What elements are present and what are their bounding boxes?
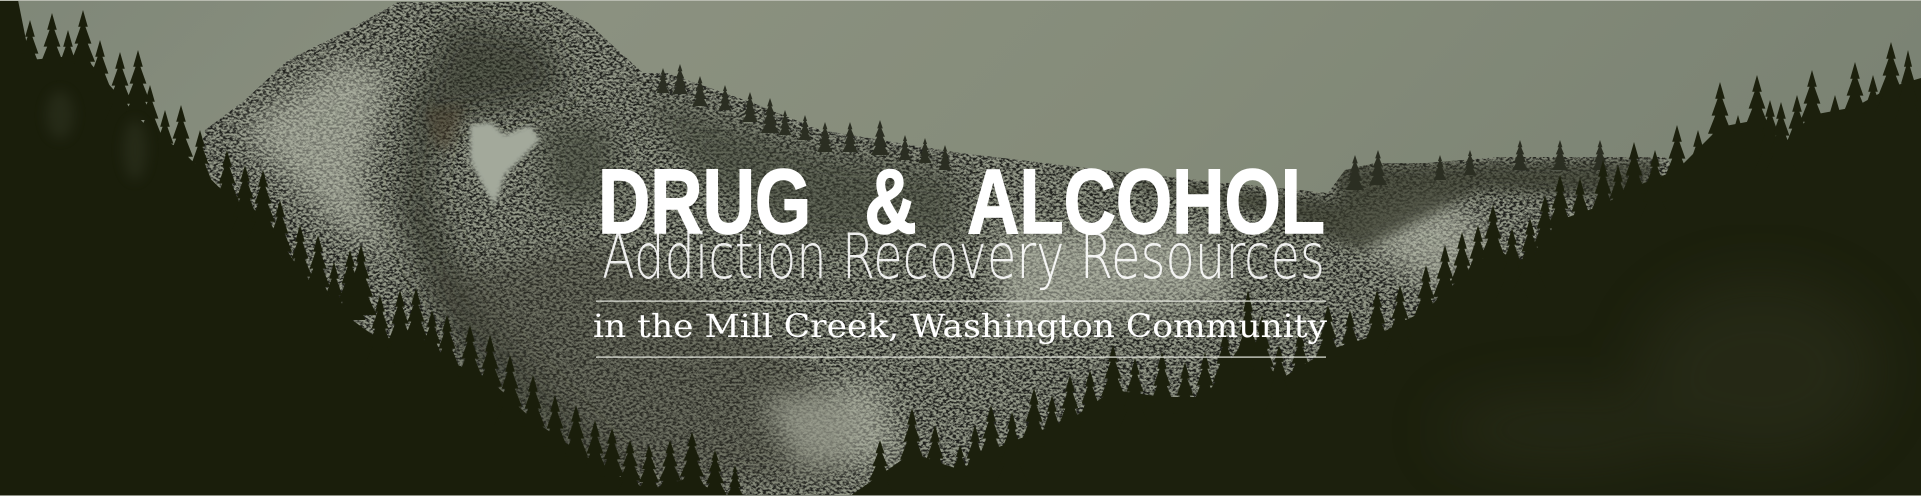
bright snow slope xyxy=(240,60,1500,470)
dark rock ridge xyxy=(400,20,640,480)
ridge trees xyxy=(656,64,1608,190)
forest: left slope xyxy=(0,0,743,496)
mist over forest xyxy=(1440,280,1880,465)
upper rule xyxy=(596,300,1326,302)
community line: in the Mill Creek, Washington Community xyxy=(593,307,1327,345)
bottom edge line xyxy=(0,495,1921,496)
wooded upper slope xyxy=(540,95,960,240)
top edge line xyxy=(0,0,1921,1)
subtitle: Addiction Recovery Resources xyxy=(602,220,1325,293)
distant trees band xyxy=(1060,160,1660,250)
snow patch xyxy=(470,122,540,205)
mist wisp left xyxy=(46,91,147,180)
forest: right slope xyxy=(850,42,1921,496)
brown rock tint xyxy=(425,105,465,150)
lower rule xyxy=(596,356,1326,358)
shaded lower slope xyxy=(420,240,860,480)
title: DRUG & ALCOHOL xyxy=(598,151,1325,253)
